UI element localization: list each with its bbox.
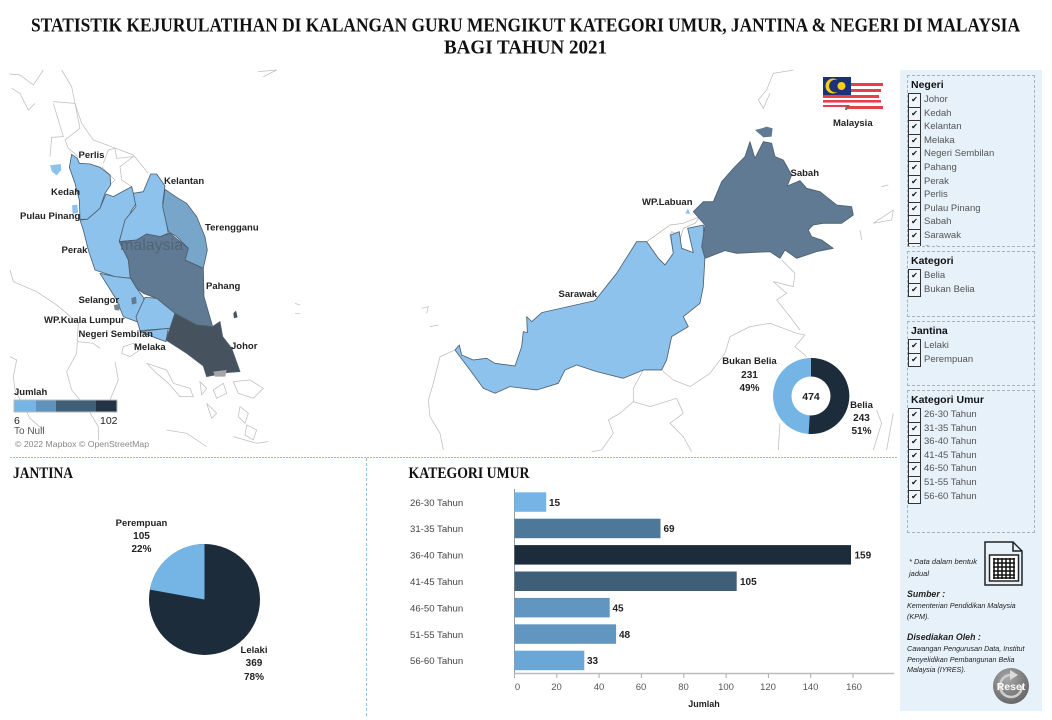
filter: Negeri: ✔ bbox=[911, 163, 918, 172]
state: Sarawak bbox=[455, 225, 705, 393]
bar chart: Kategori Umur: Jumlah bbox=[688, 699, 720, 709]
filter: Negeri: Pahang bbox=[924, 162, 957, 173]
map legend: 102 bbox=[100, 415, 118, 427]
bar chart: Kategori Umur: 40 bbox=[594, 682, 604, 693]
labels: states bbox=[20, 150, 259, 353]
filter: Kategori Umur: ✔ bbox=[911, 451, 918, 460]
bar chart: Kategori Umur: 31-35 Tahun bbox=[410, 524, 463, 535]
filter: Kategori Umur: 56-60 Tahun bbox=[924, 491, 977, 502]
bar chart: Kategori Umur: 15 bbox=[549, 498, 561, 509]
filter: Negeri: Sabah bbox=[924, 216, 951, 227]
state: Perak bbox=[80, 187, 136, 278]
bar chart: Kategori Umur: 0 bbox=[515, 682, 520, 693]
state: Pahang bbox=[119, 233, 213, 327]
labels: states: Kelantan bbox=[164, 176, 204, 187]
state: Kelantan bbox=[119, 174, 168, 242]
labels: states: Pulau Pinang bbox=[20, 211, 80, 222]
filter: Negeri: ✔ bbox=[911, 136, 918, 145]
filter: Kategori Umur: ✔ bbox=[911, 464, 918, 473]
state: Pulau Pinang bbox=[72, 205, 78, 214]
map legend bbox=[14, 387, 149, 449]
filter: Kategori Umur: 26-30 Tahun bbox=[924, 409, 977, 420]
donut chart: Belia vs Bukan Belia: Belia bbox=[850, 400, 874, 411]
state: Sabah bbox=[693, 142, 853, 258]
filter: Kategori Umur: ✔ bbox=[911, 424, 918, 433]
button: reset bbox=[993, 668, 1029, 704]
filter: Negeri: ✔ bbox=[911, 204, 918, 213]
filter: Kategori Umur: 36-40 Tahun bbox=[924, 436, 977, 447]
map legend: 6 bbox=[14, 415, 20, 427]
bar chart: Kategori Umur: 105 bbox=[740, 577, 757, 588]
map: Borneo bbox=[422, 70, 893, 452]
filter: Kategori: ✔ bbox=[911, 285, 918, 294]
filter: Jantina: Lelaki bbox=[924, 340, 949, 351]
labels: states: Selangor bbox=[78, 295, 119, 306]
watermark: malaysia bbox=[120, 237, 183, 254]
bar chart: Kategori Umur: 159 bbox=[854, 550, 872, 562]
text: source: Sumber : bbox=[907, 589, 945, 599]
filter: Kategori Umur: Kategori Umur bbox=[911, 394, 984, 406]
filter: Kategori: Belia bbox=[924, 270, 945, 281]
note: data in table form: * Data dalam bentuk jadual bbox=[909, 557, 977, 578]
map legend: Jumlah bbox=[14, 387, 47, 398]
bar chart: Kategori Umur: 120 bbox=[760, 682, 776, 693]
map: peninsular Malaysia bbox=[9, 70, 300, 447]
bar chart: Kategori Umur: 60 bbox=[636, 682, 646, 693]
pie chart: Jantina: 105 bbox=[133, 531, 150, 542]
filter: Kategori Umur: ✔ bbox=[911, 492, 918, 501]
bar chart: Kategori Umur: 51-55 Tahun bbox=[410, 630, 463, 641]
filter: Negeri: ✔ bbox=[911, 95, 918, 104]
state: Johor bbox=[166, 313, 240, 377]
labels: states: Johor bbox=[231, 341, 258, 352]
filter: Jantina: ✔ bbox=[911, 355, 918, 364]
filter: Negeri: ✔ bbox=[911, 217, 918, 226]
filter: Negeri: ✔ bbox=[911, 190, 918, 199]
island: Tioman bbox=[233, 311, 238, 318]
filter: Negeri: Pulau Pinang bbox=[924, 203, 981, 214]
labels: states: Kedah bbox=[51, 187, 80, 198]
text: source: Kementerian Pendidikan Malaysia (KPM). bbox=[907, 601, 1016, 620]
donut chart: Belia vs Bukan Belia: 474 bbox=[802, 391, 820, 403]
territory: Kuala Lumpur bbox=[131, 297, 137, 305]
bar chart: Kategori Umur: 45 bbox=[612, 604, 624, 614]
pie chart: Jantina: Lelaki bbox=[241, 645, 267, 656]
map legend: To Null bbox=[14, 426, 45, 437]
bar chart: Kategori Umur: 20 bbox=[551, 682, 562, 693]
filter: Negeri: ✔ bbox=[911, 177, 918, 186]
bar chart: Kategori Umur: 80 bbox=[678, 682, 689, 693]
territory: Labuan bbox=[685, 208, 690, 214]
labels: Borneo: Malaysia bbox=[833, 118, 873, 129]
filter: Negeri: Perak bbox=[924, 176, 949, 187]
bar chart: Kategori Umur: 48 bbox=[619, 630, 631, 641]
pie chart: Jantina: Perempuan bbox=[116, 518, 168, 529]
button: reset: Reset bbox=[997, 681, 1026, 693]
filter: Negeri bbox=[907, 75, 1035, 247]
filter: Negeri: Kelantan bbox=[924, 121, 962, 132]
island: Langkawi bbox=[50, 164, 61, 175]
labels: Borneo: Sarawak bbox=[558, 289, 598, 300]
labels: states: Pahang bbox=[206, 281, 241, 292]
filter: Negeri: Melaka bbox=[924, 135, 955, 146]
heading: Jantina: JANTINA bbox=[13, 465, 74, 482]
bar chart: Kategori Umur: 41-45 Tahun bbox=[410, 577, 463, 588]
filter: Kategori: ✔ bbox=[911, 271, 918, 280]
filter: Negeri: Johor bbox=[924, 94, 948, 105]
filter: Kategori Umur: ✔ bbox=[911, 478, 918, 487]
labels: states: Terengganu bbox=[205, 222, 259, 234]
donut chart: Belia vs Bukan Belia: 51% bbox=[851, 426, 872, 437]
filter: Negeri: ✔ bbox=[911, 109, 918, 118]
filter: Negeri: Kedah bbox=[924, 108, 951, 119]
state: Melaka bbox=[140, 328, 168, 342]
icon: Malaysian flag bbox=[823, 77, 883, 110]
filter: Kategori Umur: ✔ bbox=[911, 437, 918, 446]
panel: sidebar filters bbox=[900, 70, 1042, 711]
title: BAGI TAHUN 2021 bbox=[444, 38, 607, 58]
labels: states: Negeri Sembilan bbox=[78, 329, 153, 340]
filter: Kategori Umur: 46-50 Tahun bbox=[924, 463, 977, 474]
donut chart: Belia vs Bukan Belia: Bukan Belia bbox=[722, 356, 777, 367]
bar chart: Kategori Umur: 140 bbox=[803, 682, 818, 693]
island: Banggi bbox=[755, 127, 773, 137]
filter: Negeri: ✔ bbox=[911, 149, 918, 158]
bar chart: Kategori Umur: 26-30 Tahun bbox=[410, 498, 463, 509]
filter: Jantina bbox=[907, 321, 1035, 386]
state: Kedah and Perlis bbox=[69, 154, 111, 219]
donut chart: Belia vs Bukan Belia: 49% bbox=[739, 383, 760, 394]
state: Negeri Sembilan bbox=[136, 297, 175, 331]
filter: Kategori Umur: 41-45 Tahun bbox=[924, 450, 977, 461]
labels: states: Perlis bbox=[78, 150, 104, 161]
donut chart: Belia vs Bukan Belia: 243 bbox=[853, 413, 870, 424]
labels: Borneo: Sabah bbox=[790, 168, 819, 179]
filter: Negeri: Perlis bbox=[924, 189, 948, 200]
filter: Kategori Umur: 51-55 Tahun bbox=[924, 477, 977, 488]
bar chart: Kategori Umur: 36-40 Tahun bbox=[410, 550, 463, 562]
bar chart: Kategori Umur: 69 bbox=[664, 524, 675, 535]
pie chart: Jantina: 78% bbox=[244, 672, 264, 683]
bar chart: Kategori Umur bbox=[410, 489, 894, 709]
state: Terengganu bbox=[163, 189, 207, 268]
bar chart: Kategori Umur: 46-50 Tahun bbox=[410, 604, 463, 614]
text: source bbox=[907, 589, 1016, 620]
map legend: © 2022 Mapbox © OpenStreetMap bbox=[15, 439, 149, 449]
state: Selangor bbox=[100, 273, 145, 322]
bar chart: Kategori Umur: 160 bbox=[846, 682, 862, 693]
filter: Jantina: Perempuan bbox=[924, 354, 973, 365]
labels: states: Melaka bbox=[134, 342, 166, 353]
filter: Kategori Umur: 31-35 Tahun bbox=[924, 423, 977, 434]
labels: states: Perak bbox=[62, 245, 88, 256]
text: prepared by: Disediakan Oleh : bbox=[907, 632, 981, 642]
filter: Kategori: Bukan Belia bbox=[924, 284, 975, 295]
filter: Negeri: ✔ bbox=[911, 231, 918, 240]
labels: Borneo: WP.Labuan bbox=[642, 197, 693, 208]
filter: Negeri: ✔ bbox=[911, 122, 918, 131]
donut chart: Belia vs Bukan Belia: 231 bbox=[741, 370, 758, 381]
text: prepared by: Cawangan Pengurusan Data, Institut Penyelidikan Pembangunan Belia Malaysia (IYRES). bbox=[907, 644, 1024, 674]
title bbox=[31, 16, 1020, 58]
bar chart: Kategori Umur: 100 bbox=[718, 682, 734, 693]
filter: Negeri: Sarawak bbox=[924, 230, 961, 241]
filter: Kategori Umur bbox=[907, 390, 1035, 533]
icon: table document bbox=[984, 541, 1023, 586]
labels: Borneo bbox=[558, 118, 873, 300]
filter: Jantina: ✔ bbox=[911, 341, 918, 350]
filter: Negeri: Negeri Sembilan bbox=[924, 148, 994, 159]
filter: Kategori Umur: ✔ bbox=[911, 410, 918, 419]
bar chart: Kategori Umur: 56-60 Tahun bbox=[410, 656, 463, 667]
bar chart: Kategori Umur: 33 bbox=[587, 656, 599, 667]
filter: Kategori: Kategori bbox=[911, 255, 954, 267]
pie chart: Jantina: 369 bbox=[246, 658, 263, 669]
pie chart: Jantina: 22% bbox=[131, 544, 152, 555]
pie chart: Jantina bbox=[116, 518, 267, 683]
donut chart: Belia vs Bukan Belia bbox=[722, 356, 874, 437]
labels: states: WP.Kuala Lumpur bbox=[44, 315, 125, 326]
heading: Kategori Umur: KATEGORI UMUR bbox=[408, 465, 530, 482]
filter: Jantina: Jantina bbox=[911, 325, 948, 337]
filter: Negeri: Negeri bbox=[911, 79, 944, 91]
filter: Kategori bbox=[907, 251, 1035, 317]
